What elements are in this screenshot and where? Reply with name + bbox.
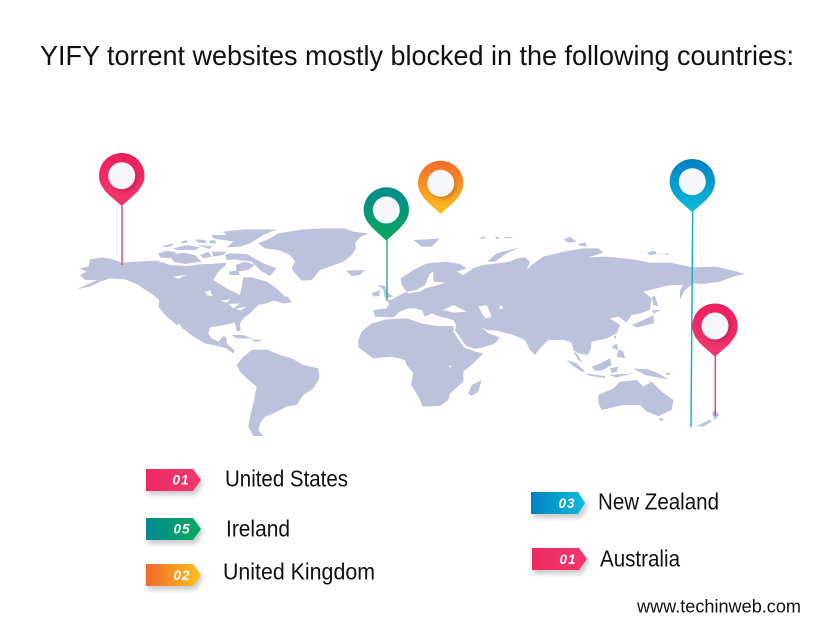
pin: United Kingdom (418, 161, 463, 273)
legend: United States: United States (225, 466, 348, 492)
pin: United States (99, 153, 144, 265)
pin: Australia (692, 304, 738, 416)
legend: Ireland (146, 516, 290, 544)
legend: Australia (532, 546, 680, 574)
legend: Ireland: 05 (173, 522, 191, 536)
legend: New Zealand (531, 488, 719, 518)
pin: New Zealand (670, 159, 715, 427)
eastern hemisphere (358, 237, 745, 427)
legend: New Zealand: New Zealand (598, 488, 719, 514)
title: YIFY torrent websites mostly blocked in the following countries: (40, 40, 794, 71)
legend: United States (146, 466, 348, 495)
western hemisphere (77, 228, 368, 436)
legend: United Kingdom (146, 558, 375, 590)
legend: United Kingdom: United Kingdom (223, 558, 375, 584)
legend: United States: 01 (172, 472, 190, 488)
world map (77, 228, 745, 436)
website credit: www.techinweb.com (636, 596, 801, 616)
legend: Australia: Australia (600, 546, 680, 572)
legend: Ireland: Ireland (226, 516, 290, 542)
legend: Australia: 01 (559, 552, 577, 567)
pin: Ireland (364, 187, 409, 300)
legend: New Zealand: 03 (558, 496, 576, 511)
legend: United Kingdom: 02 (173, 568, 191, 583)
